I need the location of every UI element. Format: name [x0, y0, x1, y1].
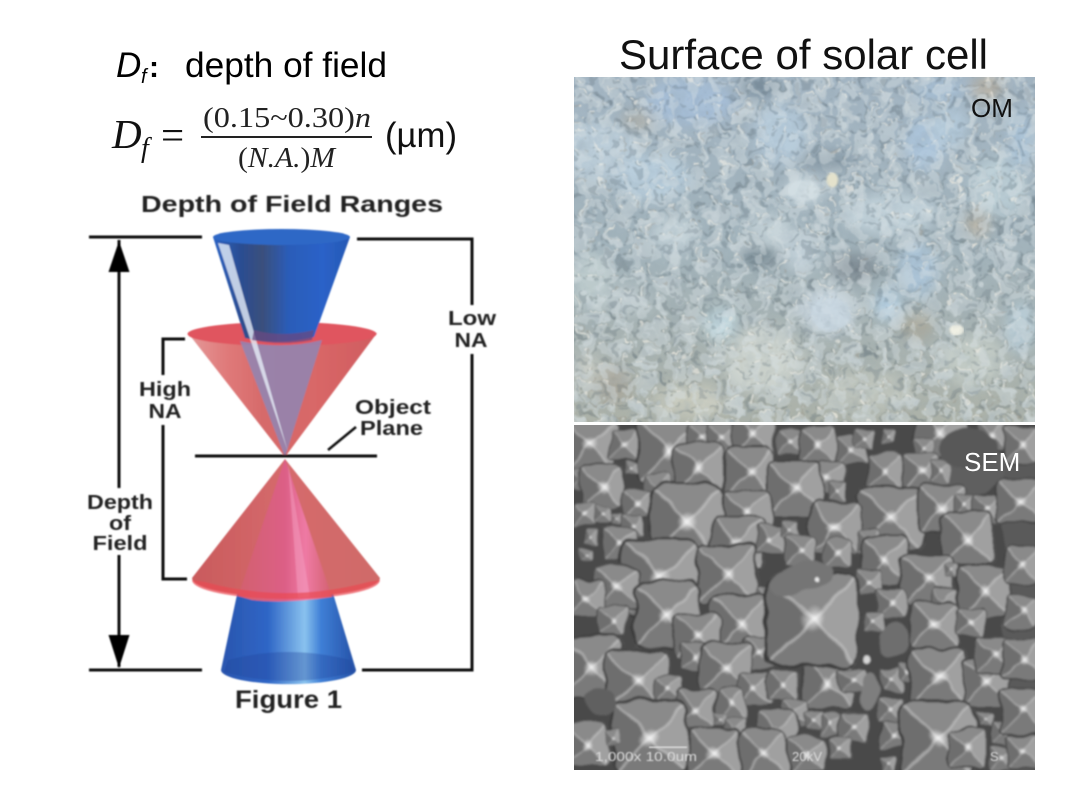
caption: SEM scale bar and settings: 20kV: [792, 749, 822, 764]
arrow: depth of field range: [89, 236, 202, 672]
icon: lower red cone (high NA): [192, 459, 380, 601]
label: Df depth of field: D: [116, 46, 141, 85]
icon: lower blue cone (low NA): [221, 590, 356, 684]
label: Object Plane: Object: [355, 397, 431, 419]
label: High NA: High: [139, 379, 191, 401]
bracket: low NA: [357, 239, 472, 670]
label: Low NA: Low: [448, 308, 497, 330]
label: SEM: SEM: [964, 447, 1020, 477]
label: High NA: [139, 379, 191, 423]
label: Df depth of field: :: [149, 51, 159, 84]
panel: OM micrograph: [554, 54, 1054, 447]
formula: depth of field equation: (0.15~0.30) n: [203, 103, 371, 134]
formula: depth of field equation: (N.A.)M: [238, 143, 337, 174]
caption: SEM scale bar and settings: 1,000x 10.0um: [595, 749, 697, 764]
label: Object Plane: [355, 397, 431, 440]
label: Depth of Field: Depth: [87, 492, 153, 514]
line: object plane: [195, 427, 377, 458]
icon: upper red cone (high NA): [188, 322, 377, 457]
label: Depth of Field: of: [109, 513, 131, 535]
formula: depth of field equation: (µm): [385, 116, 457, 155]
formula: depth of field equation: =: [161, 112, 184, 158]
label: Low NA: NA: [454, 330, 488, 352]
formula: depth of field equation: [111, 103, 457, 174]
label: Df depth of field: depth of field: [185, 46, 387, 85]
label: Depth of Field: [87, 492, 153, 555]
heading: Depth of Field Ranges: Depth of Field Ranges: [141, 191, 443, 217]
figure: depth of field ranges diagram: [87, 191, 497, 714]
label: OM: OM: [971, 93, 1013, 123]
caption: SEM scale bar and settings: S: [990, 749, 999, 764]
label: Low NA: [448, 308, 497, 352]
caption: SEM scale bar and settings: [595, 746, 999, 764]
formula: depth of field equation: D: [111, 111, 142, 157]
title: Surface of solar cell: Surface of solar cell: [619, 31, 988, 78]
texture: pyramids: [559, 405, 1047, 785]
label: Object Plane: Plane: [360, 418, 423, 440]
label: Depth of Field: Field: [92, 533, 148, 555]
formula: depth of field equation: f: [141, 133, 152, 164]
caption: Figure 1: Figure 1: [235, 686, 342, 714]
icon: upper blue cone (low NA): [213, 229, 350, 452]
label: Df depth of field: [116, 46, 387, 88]
label: Df depth of field: f: [141, 66, 149, 88]
panel: SEM micrograph: [559, 405, 1047, 785]
bracket: high NA: [163, 339, 187, 579]
label: High NA: NA: [148, 401, 182, 423]
